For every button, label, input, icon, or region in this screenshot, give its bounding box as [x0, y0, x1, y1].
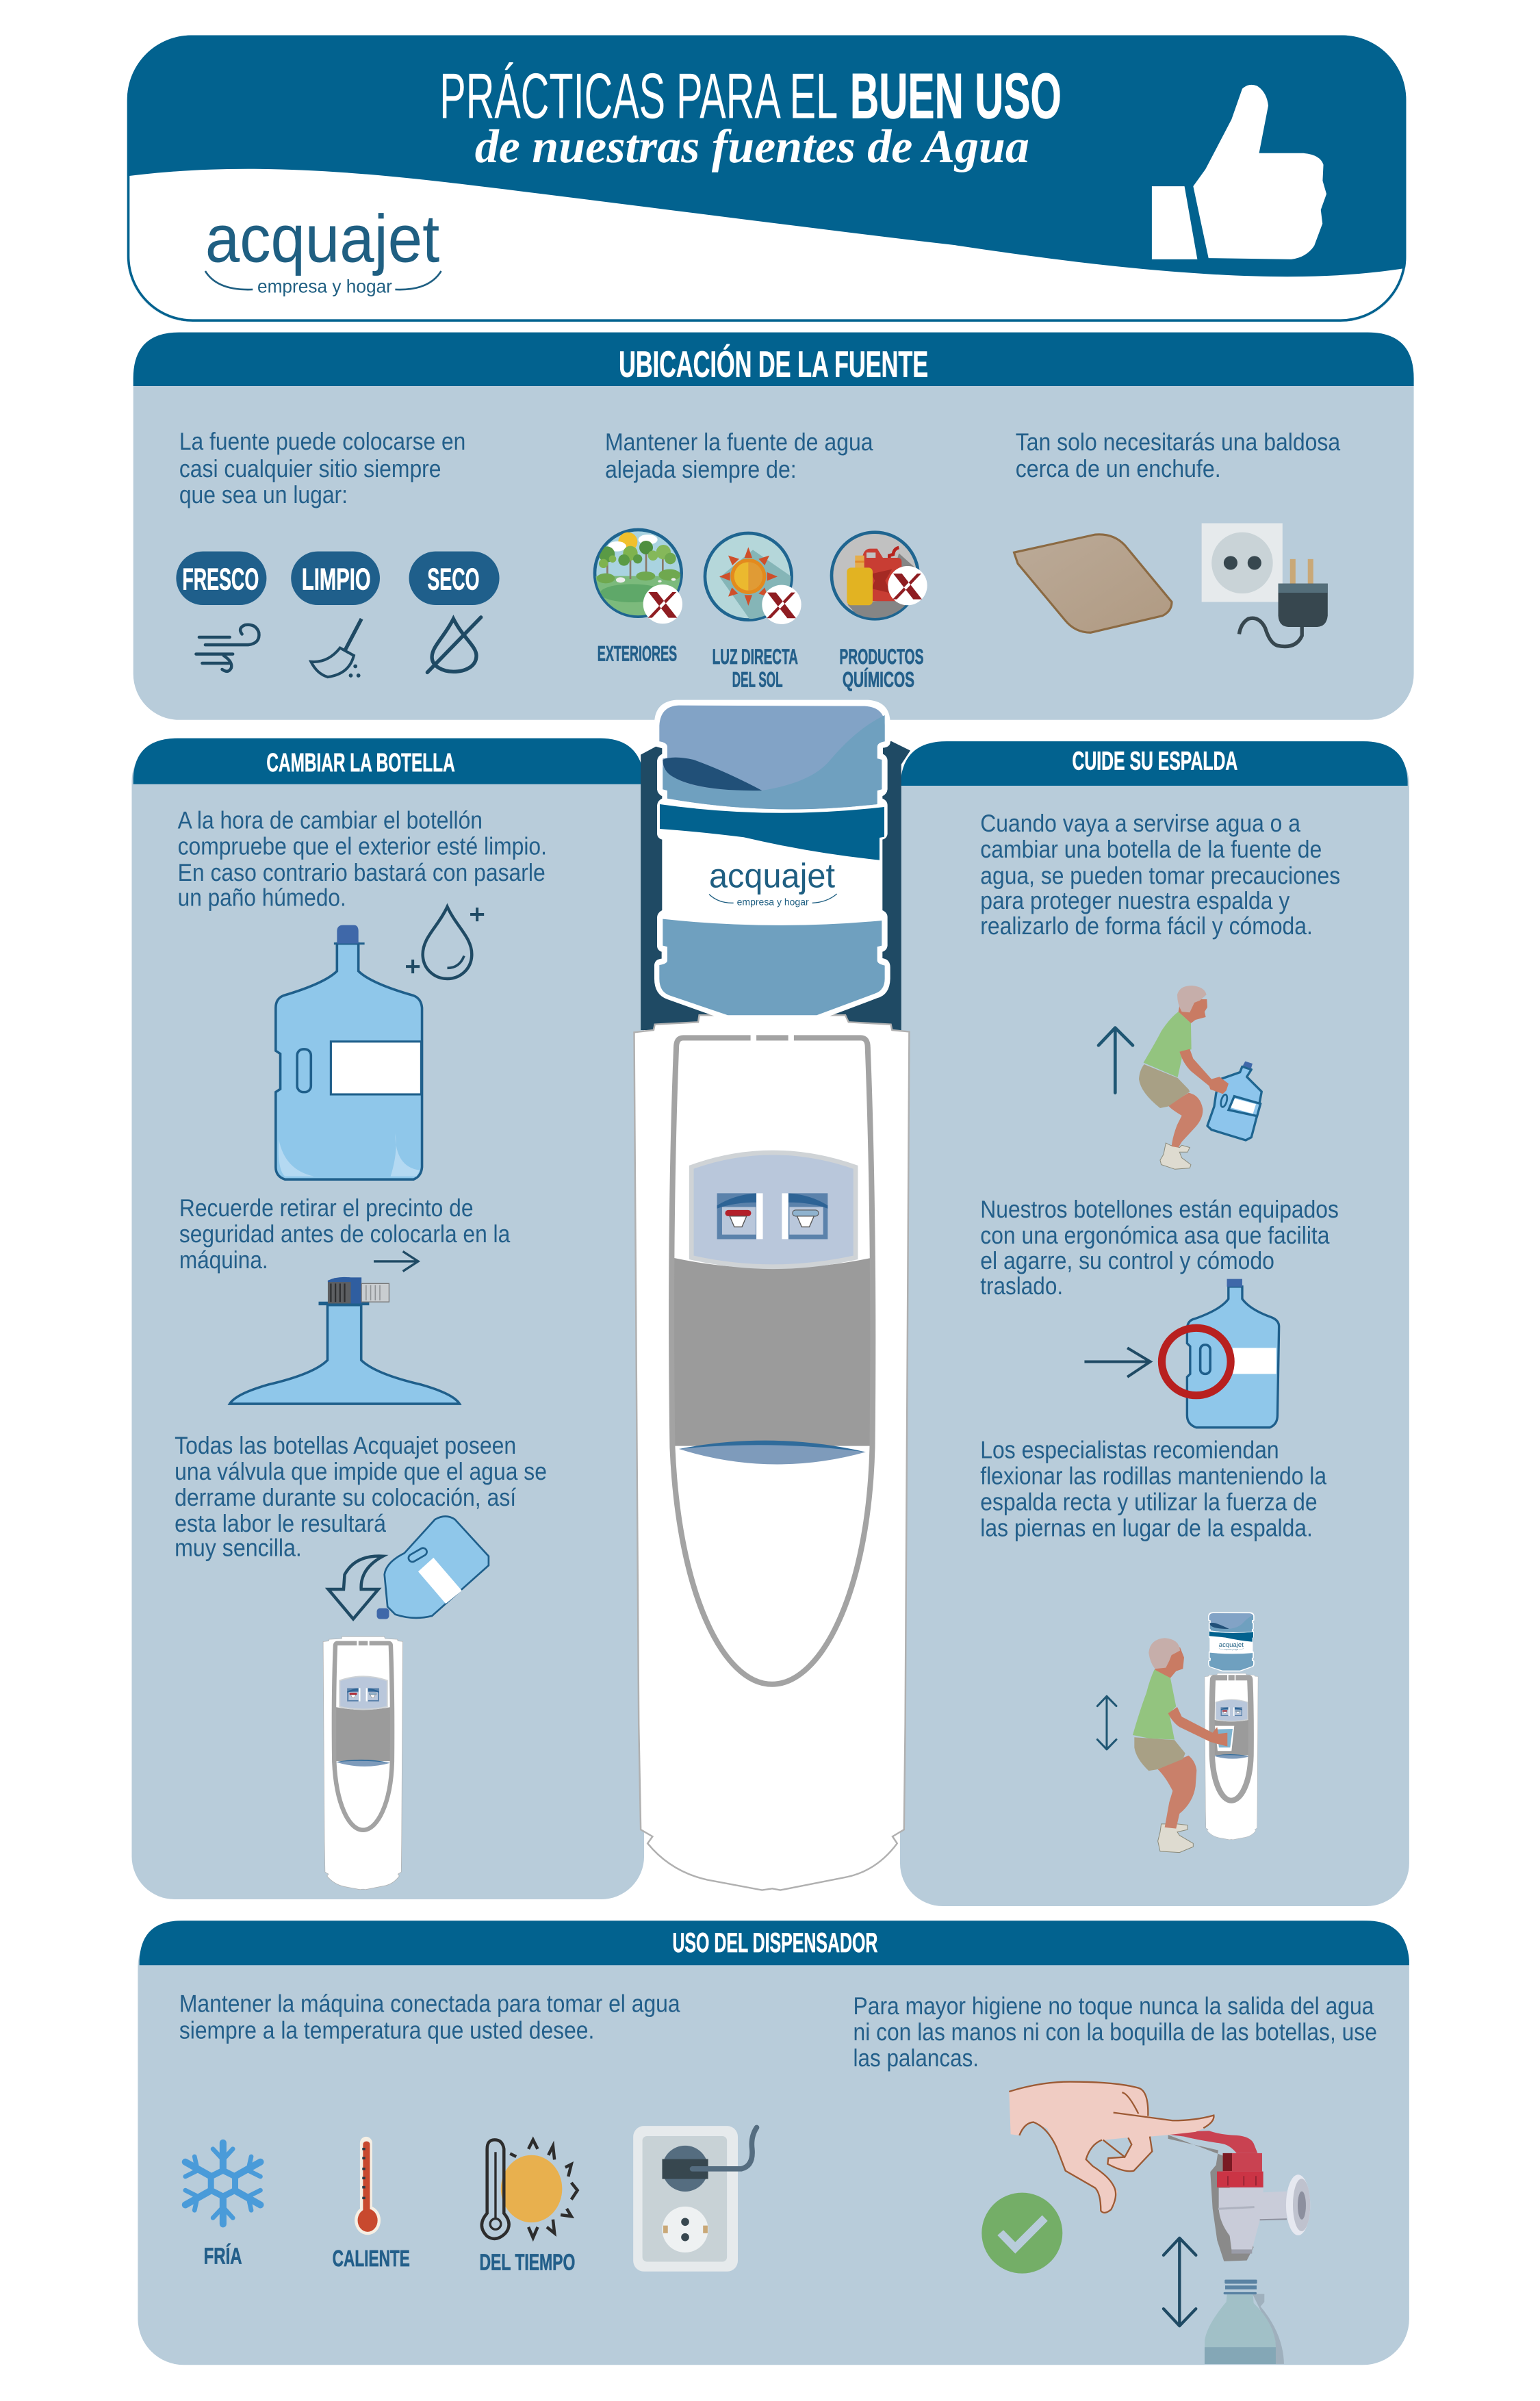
text: válvula: esta labor le resultará: [175, 1512, 386, 1538]
text: alejada: Mantener la fuente de agua: [605, 431, 873, 457]
text: botellón limpio: compruebe que el exterior esté limpio.: [178, 835, 547, 861]
text: higiene: las palancas.: [854, 2046, 979, 2072]
panel: ubicación de la fuente: [133, 333, 1414, 720]
illustration: water bottle: [654, 700, 890, 1021]
figure: man: [1139, 986, 1261, 1169]
dark backdrop behind bottle: [641, 741, 910, 1030]
group: hand, tap, bottle: [981, 2081, 1310, 2364]
icon: double arrow: [1164, 2238, 1196, 2326]
subtitle: de nuestras fuentes de Agua: [475, 120, 1029, 173]
text: válvula: Todas las botellas Acquajet poseen: [175, 1434, 516, 1460]
icon: water drop: [406, 907, 484, 979]
icon: arrow right: [374, 1251, 418, 1271]
label: luz directa del sol: DEL SOL: [732, 667, 783, 691]
label: exteriores: EXTERIORES: [598, 641, 677, 665]
label: productos químicos: QUÍMICOS: [843, 667, 914, 691]
text: higiene: Para mayor higiene no toque nunca la salida del agua: [854, 1994, 1374, 2020]
label: productos químicos: PRODUCTOS: [839, 644, 923, 669]
text: lugar: casi cualquier sitio siempre: [179, 457, 441, 483]
icon: thermometer: [355, 2137, 381, 2235]
icon: tap: [1168, 2131, 1310, 2254]
text: higiene: [854, 1994, 1377, 2072]
label: caliente: CALIENTE: [333, 2246, 410, 2272]
header banner: [127, 35, 1406, 322]
text: precinto: seguridad antes de colocarla en la: [179, 1222, 510, 1248]
icon: check: [981, 2193, 1062, 2274]
text: precauciones: cambiar una botella de la fuente de: [980, 838, 1322, 864]
panel: cuide su espalda: [900, 741, 1409, 1906]
text: botellón limpio: A la hora de cambiar el botellón: [178, 809, 483, 835]
icon: exteriores: [593, 530, 684, 624]
illustration: water dispenser: [634, 1015, 909, 1890]
text: rodillas: [980, 1438, 1326, 1543]
text: precauciones: agua, se pueden tomar precauciones: [980, 864, 1340, 890]
logo: acquajet: acquajet: [205, 202, 439, 277]
text: botellón limpio: En caso contrario bastará con pasarle: [178, 861, 546, 887]
pill: seco: SECO: [427, 564, 479, 598]
icons: avoid exteriors, sun, chemicals: [593, 530, 927, 624]
text: precauciones: realizarlo de forma fácil y cómoda.: [980, 914, 1313, 940]
text: baldosa: [1016, 431, 1340, 483]
text: rodillas: flexionar las rodillas manteniendo la: [980, 1464, 1326, 1490]
icon: curved arrow down: [329, 1556, 383, 1619]
figure: man at dispenser with arrow: [1097, 1638, 1234, 1853]
text: lugar: que sea un lugar:: [179, 483, 348, 509]
text: precinto: [179, 1196, 510, 1274]
figure: man lifting bottle with arrow: [1099, 986, 1261, 1169]
text: rodillas: Los especialistas recomiendan: [980, 1438, 1279, 1464]
text: alejada: alejada siempre de:: [605, 458, 797, 484]
icon: small dispenser: [323, 1636, 402, 1890]
icon: luz directa del sol: [705, 533, 801, 624]
text: máquina conectada: Mantener la máquina conectada para tomar el agua: [179, 1992, 680, 2018]
label: luz directa del sol: [713, 644, 798, 691]
text: lugar: La fuente puede colocarse en: [179, 430, 465, 456]
text: asa: el agarre, su control y cómodo: [980, 1249, 1274, 1275]
icon: wind: [196, 625, 259, 671]
text: válvula: muy sencilla.: [175, 1537, 302, 1563]
panel: cambiar la botella: [131, 739, 644, 1899]
icon: tilted bottle: [377, 1517, 489, 1619]
title: PRÁCTICAS PARA EL: [439, 60, 838, 131]
text: rodillas: espalda recta y utilizar la fuerza de: [980, 1490, 1318, 1517]
pill: fresco: FRESCO: [182, 564, 259, 598]
text: válvula: [175, 1434, 547, 1563]
text: máquina conectada: siempre a la temperatura que usted desee.: [179, 2019, 594, 2045]
icon: bottle: [276, 925, 422, 1179]
text: asa: Nuestros botellones están equipados: [980, 1198, 1339, 1224]
label: del tiempo: DEL TIEMPO: [479, 2250, 576, 2276]
text: precauciones: [980, 812, 1340, 940]
pill: fresco: [176, 552, 266, 605]
icon: tiny dispenser with bottle: [1205, 1612, 1258, 1840]
pill: limpio: LIMPIO: [302, 564, 371, 598]
icon: productos químicos: [832, 532, 927, 621]
icon: snowflake: [185, 2143, 260, 2224]
icon: arrow to handle: [1084, 1348, 1151, 1377]
text: máquina conectada: [179, 1992, 680, 2045]
text: precinto: máquina.: [179, 1248, 268, 1274]
text: botellón limpio: un paño húmedo.: [178, 886, 346, 912]
icon: double arrow: [1097, 1696, 1116, 1749]
text: rodillas: las piernas en lugar de la espalda.: [980, 1517, 1313, 1543]
icon: weather: [482, 2140, 578, 2239]
icon: thumbs up: [1152, 85, 1326, 259]
text: baldosa: Tan solo necesitarás una baldosa: [1016, 431, 1340, 457]
label: fría: FRÍA: [204, 2242, 242, 2270]
text: higiene: ni con las manos ni con la boquilla de las botellas, use: [854, 2020, 1377, 2046]
pill: seco: [409, 552, 500, 605]
heading: cambiar la botella: CAMBIAR LA BOTELLA: [266, 748, 455, 778]
text: asa: traslado.: [980, 1274, 1063, 1300]
pill: limpio: [291, 552, 380, 605]
text: botellón limpio: [178, 809, 547, 912]
logo: acquajet: empresa y hogar: [257, 276, 392, 297]
icon: no drop: [427, 617, 481, 672]
text: lugar: [179, 430, 465, 509]
title: BUEN USO: [850, 60, 1062, 131]
icon: enchufe: [1202, 523, 1328, 646]
icon: outlet with cable: [633, 2126, 757, 2272]
icon: bottle with handle highlight: [1162, 1279, 1279, 1428]
label: productos químicos: [839, 644, 923, 691]
heading: uso del dispensador: USO DEL DISPENSADOR: [672, 1927, 877, 1958]
text: asa: con una ergonómica asa que facilita: [980, 1224, 1330, 1250]
icon: hand: [1009, 2081, 1215, 2214]
text: alejada: [605, 431, 873, 484]
icon: baldosa: [1014, 535, 1172, 632]
icon: arrow up: [1099, 1028, 1133, 1093]
text: válvula: derrame durante su colocación, así: [175, 1486, 517, 1512]
icon: bottle neck with seal: [230, 1277, 459, 1404]
text: asa: [980, 1198, 1339, 1300]
text: precinto: Recuerde retirar el precinto de: [179, 1196, 474, 1222]
text: precauciones: Cuando vaya a servirse agua o a: [980, 812, 1300, 838]
icon: tap shadow: [1168, 2135, 1254, 2261]
panel: uso del dispensador: [138, 1921, 1409, 2365]
heading: cuide su espalda: CUIDE SU ESPALDA: [1073, 747, 1237, 775]
text: baldosa: cerca de un enchufe.: [1016, 457, 1221, 483]
heading: ubicación: UBICACIÓN DE LA FUENTE: [619, 343, 928, 386]
icon: broom: [311, 619, 361, 678]
figure: man: [1133, 1638, 1234, 1853]
label: luz directa del sol: LUZ DIRECTA: [713, 644, 798, 669]
text: precauciones: para proteger nuestra espalda y: [980, 889, 1289, 915]
icon: glass bottle: [1205, 2280, 1284, 2364]
text: válvula: una válvula que impide que el agua se: [175, 1460, 547, 1486]
